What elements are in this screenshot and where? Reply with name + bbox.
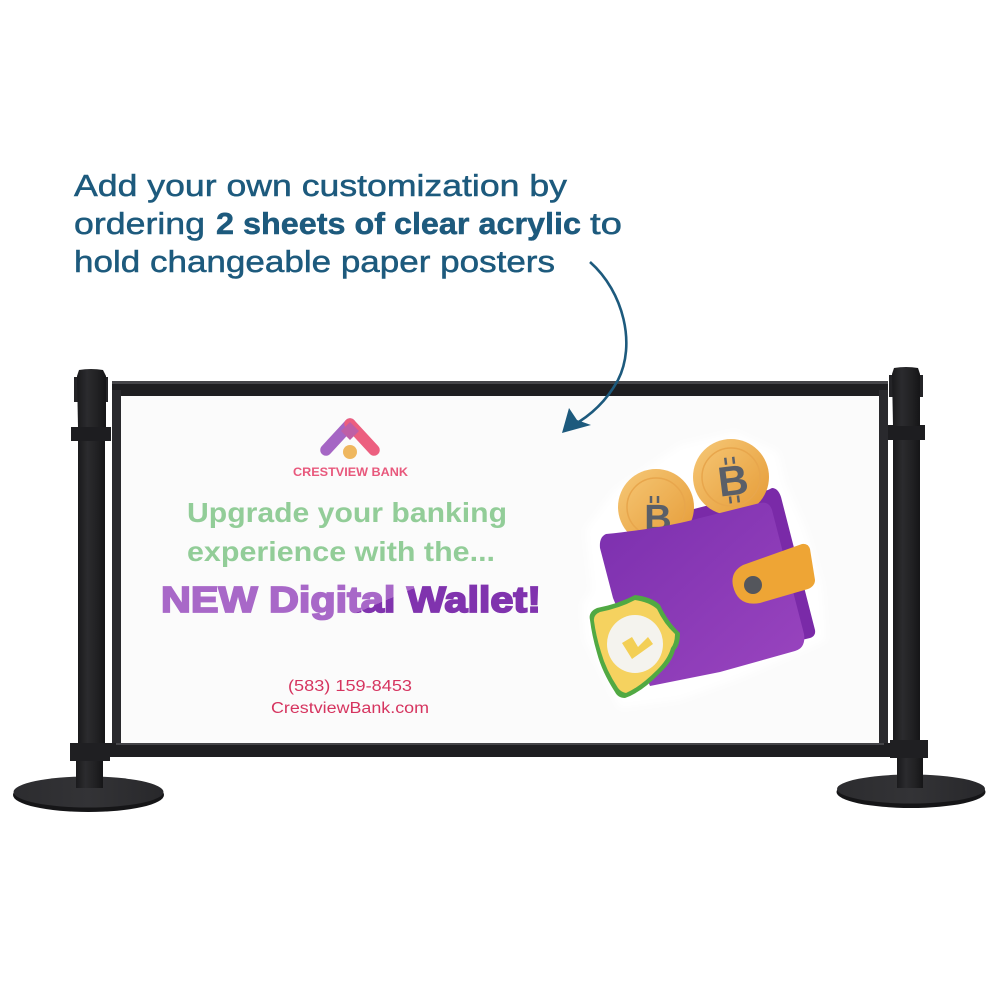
sticker outline <box>582 432 826 708</box>
wallet back panel <box>690 488 815 650</box>
wallet strap <box>732 544 815 604</box>
contact details <box>271 678 429 717</box>
coin: left <box>618 469 694 545</box>
security shield <box>590 595 680 698</box>
right post <box>836 367 986 808</box>
arrow <box>562 262 626 433</box>
banner headline: experience with the... <box>187 536 495 567</box>
callout text: to <box>590 206 622 241</box>
contact details: CrestviewBank.com <box>271 700 429 717</box>
left post <box>13 369 164 812</box>
callout text: ordering <box>74 206 205 241</box>
wallet illustration <box>582 432 826 708</box>
contact details: (583) 159-8453 <box>288 678 412 695</box>
banner panel <box>120 396 879 744</box>
bank logo <box>293 422 408 479</box>
banner headline: Upgrade your banking <box>187 497 507 528</box>
banner frame <box>110 381 890 757</box>
wallet body <box>600 503 804 686</box>
coin: right: B <box>715 455 751 506</box>
callout text: 2 sheets of clear acrylic <box>216 206 581 241</box>
bank logo: CRESTVIEW BANK <box>293 465 408 479</box>
strap button <box>744 576 762 594</box>
new digital wallet title: NEW Digital Wallet! <box>161 579 541 620</box>
callout text: Add your own customization by <box>74 168 568 203</box>
banner headline <box>187 497 507 567</box>
callout text: hold changeable paper posters <box>74 244 555 279</box>
callout text <box>74 168 622 279</box>
coin: left: B <box>644 498 672 540</box>
coin: right <box>693 439 769 515</box>
